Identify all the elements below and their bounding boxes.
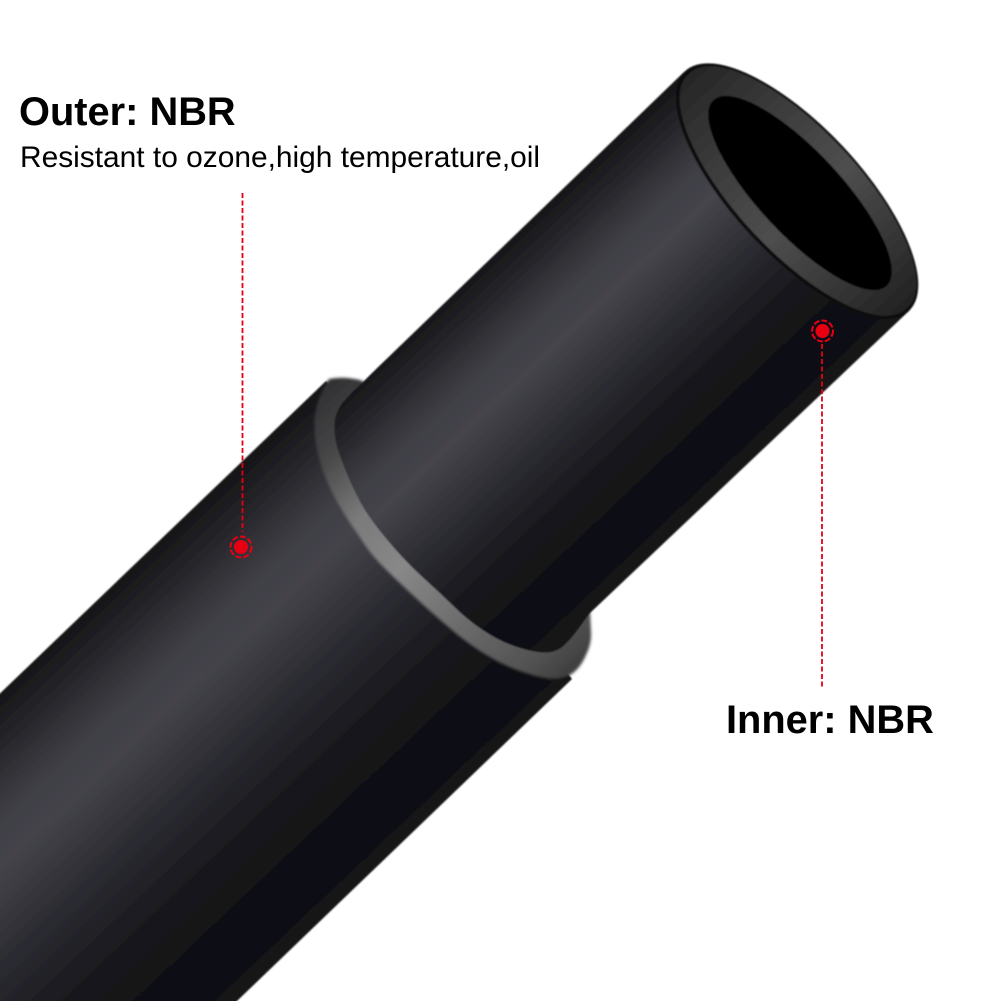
callout line: outer xyxy=(242,193,244,532)
callout line: inner xyxy=(821,344,823,688)
title: inner material: Inner: NBR xyxy=(726,698,934,742)
marker: outer xyxy=(230,536,252,558)
description: outer properties: Resistant to ozone,high temperature,oil xyxy=(20,141,540,174)
title: outer material: Outer: NBR xyxy=(19,90,236,134)
upper tube body xyxy=(334,72,910,653)
tube end opening xyxy=(638,27,956,355)
inner bore xyxy=(683,72,917,314)
collar step ring xyxy=(314,378,591,679)
marker: inner xyxy=(812,320,833,342)
lower outer tube xyxy=(0,381,572,1001)
outer rim xyxy=(638,27,956,355)
wall ring xyxy=(680,66,916,316)
